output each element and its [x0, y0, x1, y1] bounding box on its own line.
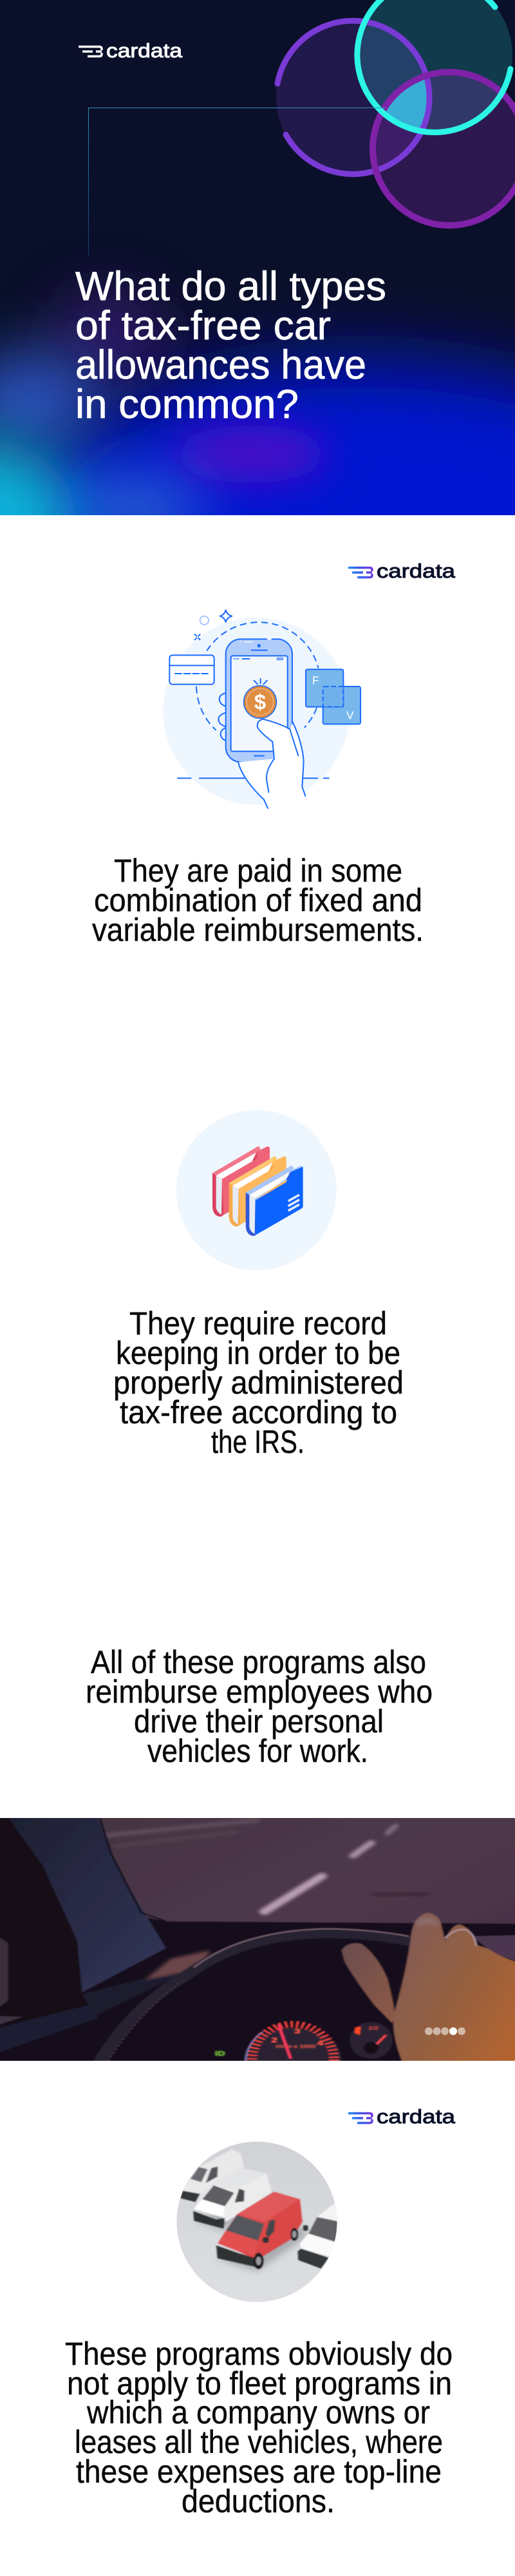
text block: personal vehicles: All of these programs also — [91, 1644, 426, 1680]
panel: dark hero header — [0, 0, 515, 515]
text block: fleet programs: These programs obviously do — [65, 2336, 453, 2372]
tachometer gauge: 3 — [294, 2027, 301, 2035]
icon: smartphone — [226, 639, 292, 762]
text block: personal vehicles: drive their personal — [134, 1703, 384, 1739]
text block: fixed and variable: variable reimbursements. — [92, 912, 424, 948]
dashboard reflection — [144, 1950, 211, 1980]
logo: cardata colour, section one — [348, 560, 456, 582]
icon: sparkles — [195, 610, 232, 639]
lower left trim — [0, 2005, 98, 2056]
text block: fixed and variable: They are paid in some — [114, 853, 402, 889]
text block: record keeping — [113, 1305, 404, 1460]
logo: cardata colour, section one: cardata — [377, 560, 456, 582]
photo: hand on steering wheel at dusk — [0, 1818, 515, 2061]
icon: dollar coin: $ — [254, 691, 267, 715]
icon: fixed and variable squares — [306, 669, 360, 724]
text block: fleet programs: these expenses are top-line — [76, 2454, 442, 2490]
thumb — [342, 1943, 395, 2023]
illustration: folders — [176, 1110, 337, 1270]
text block: fleet programs: leases all the vehicles, where — [75, 2424, 443, 2460]
van: middle white — [193, 2168, 272, 2229]
title: allowances have — [75, 343, 366, 388]
text block: fleet programs: deductions. — [182, 2483, 335, 2519]
hand — [393, 1913, 515, 2069]
tachometer gauge: 2 — [271, 2036, 277, 2045]
title: in common? — [75, 382, 299, 427]
van: right white — [297, 2202, 341, 2269]
text block: fleet programs: which a company owns or — [86, 2394, 430, 2430]
van: back white — [180, 2149, 244, 2202]
text block: personal vehicles: reimburse employees who — [86, 1674, 433, 1710]
logo: cardata colour, section two — [348, 2105, 456, 2128]
icon: fingers behind phone — [218, 693, 226, 741]
icon: red folder — [212, 1146, 270, 1217]
road streaks and lane dashes — [105, 1821, 424, 1911]
tachometer gauge: r/min x 1000 — [276, 2044, 315, 2049]
logo: cardata colour, section two: cardata — [377, 2105, 456, 2128]
fuel gauge: 1/2 — [368, 2025, 379, 2031]
text block: personal vehicles — [86, 1644, 433, 1769]
text block: record keeping: keeping in order to be — [116, 1335, 400, 1371]
text block: record keeping: properly administered — [113, 1365, 404, 1401]
text block: record keeping: tax-free according to — [120, 1394, 397, 1430]
ring — [445, 1929, 476, 1946]
icon: credit card — [169, 655, 214, 685]
icon: blue folder — [246, 1166, 303, 1236]
text block: fixed and variable: combination of fixed and — [94, 882, 422, 918]
icon: orange folder — [229, 1156, 286, 1227]
thin frame line — [89, 108, 386, 256]
A pillar — [4, 1812, 166, 1992]
tachometer gauge — [243, 2020, 342, 2061]
steering wheel rim — [97, 1934, 417, 2067]
dashboard dark — [0, 1917, 515, 2069]
image: circle of fleet vans with one red van — [176, 2142, 337, 2302]
dashed orbit and ground line — [178, 622, 329, 778]
text block: personal vehicles: vehicles for work. — [147, 1733, 368, 1769]
text block: fleet programs — [65, 2336, 453, 2519]
logo: cardata white: cardata — [106, 39, 183, 62]
text block: record keeping: the IRS. — [211, 1424, 304, 1460]
logo: cardata white — [79, 39, 183, 62]
text block: fleet programs: not apply to fleet programs in — [67, 2365, 452, 2401]
icon: hand — [238, 719, 305, 808]
fuel gauge — [350, 2022, 393, 2059]
tachometer gauge: 4 — [317, 2040, 324, 2047]
ground shadows — [192, 2211, 306, 2271]
icon: fixed and variable squares: V — [346, 709, 354, 722]
left dark column — [0, 1818, 86, 2025]
carousel dots — [425, 2027, 465, 2035]
title — [75, 264, 386, 427]
green indicator: ID — [215, 2050, 225, 2057]
illustration: phone with dollar coin, card and F/V squares — [163, 610, 360, 808]
decorative overlapping circles — [276, 0, 515, 225]
text block: record keeping: They require record — [129, 1305, 387, 1341]
icon: fixed and variable squares: F — [312, 674, 319, 687]
text block: fixed and variable — [92, 853, 424, 948]
icon: dollar coin — [244, 679, 276, 718]
gradient glow background — [0, 267, 515, 515]
van: red — [216, 2192, 303, 2269]
title: What do all types — [75, 264, 386, 309]
title: of tax-free car — [75, 303, 331, 348]
